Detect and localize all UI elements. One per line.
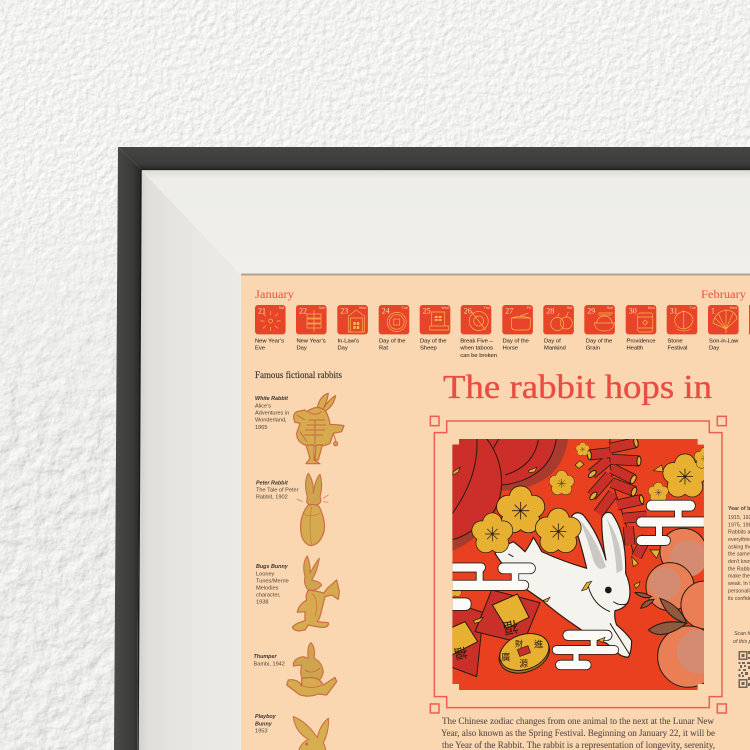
day 1: Son-in-Law Day xyxy=(708,305,739,352)
day 25: Day of the Sheep: Sheep xyxy=(420,346,437,352)
day 22: New Year's Day: 22 xyxy=(299,306,307,316)
caption: Bugs Bunny xyxy=(256,564,289,606)
day 24: Day of the Rat: Tue xyxy=(402,306,408,310)
day 25: Day of the Sheep xyxy=(420,305,450,352)
day 21: New Year's Eve: Eve xyxy=(255,346,265,352)
icon: White Rabbit xyxy=(294,393,344,464)
caption: Bugs Bunny: Tunes/Merrie xyxy=(256,579,289,585)
caption: Playboy Bunny: Playboy xyxy=(255,714,277,720)
poster paper xyxy=(241,274,750,750)
caption: Bugs Bunny: Bugs Bunny xyxy=(256,564,289,570)
stylised clouds xyxy=(443,501,717,669)
day 31: Stone Festival xyxy=(667,305,697,352)
day 29: Day of the Grain: Grain xyxy=(586,346,600,352)
day 23: In-Law's Day: Mon xyxy=(359,306,366,310)
lanterns xyxy=(450,437,568,552)
icon: Thumper xyxy=(287,643,337,696)
red envelopes: 福 xyxy=(453,644,469,661)
caption: Playboy Bunny: 1953 xyxy=(255,729,267,735)
day 30: Providence Health: Mon xyxy=(648,306,655,310)
day 29: Day of the Grain xyxy=(584,305,615,352)
caption: Peter Rabbit: Peter Rabbit xyxy=(256,480,288,486)
caption: White Rabbit: White Rabbit xyxy=(255,396,288,402)
day 27: Day of the Horse: Horse xyxy=(502,346,518,352)
day 26: Break Five xyxy=(459,305,497,359)
day 1: Son-in-Law Day: 1 xyxy=(711,306,715,316)
day 22: New Year's Day: Day xyxy=(296,346,307,352)
caption: Bugs Bunny: 1938 xyxy=(256,600,268,606)
month label: February: February xyxy=(701,289,746,301)
day 27: Day of the Horse: Day of the xyxy=(502,338,529,344)
day 29: Day of the Grain: Day of the xyxy=(586,338,612,344)
month label: January: January xyxy=(255,289,294,301)
intro paragraph: The Chinese zodiac changes from one animal to the next at the Lunar New xyxy=(442,716,714,727)
day 30: Providence Health: Providence xyxy=(627,338,656,344)
firecrackers xyxy=(587,438,647,557)
day 31: Stone Festival: Tue xyxy=(690,306,696,310)
caption: Playboy Bunny: Bunny xyxy=(255,721,273,727)
day 28: Day of Mankind: Sat xyxy=(567,306,572,310)
day 30: Providence Health xyxy=(626,305,656,352)
icon: Bugs Bunny xyxy=(292,556,339,631)
day 25: Day of the Sheep: Wed xyxy=(441,306,449,310)
day 28: Day of Mankind: Mankind xyxy=(544,346,566,352)
day 21: New Year's Eve xyxy=(255,305,286,352)
intro paragraph xyxy=(441,716,715,750)
day 31: Stone Festival: Festival xyxy=(668,346,687,352)
illustration: leaping rabbit xyxy=(452,439,704,690)
caption: Peter Rabbit: The Tale of Peter xyxy=(256,487,299,493)
picture frame xyxy=(114,147,750,750)
title: The rabbit hops in xyxy=(443,369,712,406)
caption: Peter Rabbit: Rabbit, 1902 xyxy=(256,495,288,501)
day 21: New Year's Eve: Sat xyxy=(279,306,284,310)
day 23: In-Law's Day: 23 xyxy=(340,306,348,316)
next day tile, cropped xyxy=(749,305,750,334)
day 29: Day of the Grain: Sun xyxy=(607,306,613,310)
day 28: Day of Mankind: Day of xyxy=(544,338,561,344)
caption: White Rabbit xyxy=(255,396,289,431)
day 25: Day of the Sheep: 25 xyxy=(423,306,431,316)
red envelopes: 福 xyxy=(502,617,520,636)
day 28: Day of Mankind: 28 xyxy=(546,306,554,316)
day 26: Break Five: when taboos xyxy=(459,346,493,352)
gold coin: 進 xyxy=(534,638,544,649)
caption: White Rabbit: 1865 xyxy=(255,425,267,431)
rabbit xyxy=(495,512,632,657)
gold coin xyxy=(498,633,550,674)
caption: Bugs Bunny: character, xyxy=(256,593,281,599)
oranges and leaves xyxy=(634,528,704,688)
QR code xyxy=(738,651,750,688)
day 24: Day of the Rat xyxy=(379,305,409,352)
calendar strip xyxy=(255,305,750,359)
day 22: New Year's Day: Sun xyxy=(319,306,325,310)
illustration background xyxy=(450,437,707,693)
day 24: Day of the Rat: 24 xyxy=(382,306,390,316)
day 26: Break Five: 26 xyxy=(464,306,472,316)
day 22: New Year's Day xyxy=(296,305,327,352)
QR caption xyxy=(733,631,750,645)
day 26: Break Five: Break Five – xyxy=(460,338,494,344)
caption: White Rabbit: Alice's xyxy=(255,403,271,409)
day 28: Day of Mankind xyxy=(543,305,574,352)
gold coin: 廣 xyxy=(501,652,510,663)
day 23: In-Law's Day: Day xyxy=(337,346,348,352)
day 21: New Year's Eve: 21 xyxy=(258,306,266,316)
day 30: Providence Health: 30 xyxy=(629,306,637,316)
panel: fictional rabbits xyxy=(254,393,344,750)
icon: Peter Rabbit xyxy=(297,473,328,546)
decorative red frame xyxy=(430,416,726,713)
day 30: Providence Health: Health xyxy=(627,346,643,352)
day 31: Stone Festival: 31 xyxy=(670,306,678,316)
plum blossoms xyxy=(447,443,716,596)
day 22: New Year's Day: New Year’s xyxy=(296,338,326,344)
caption: Playboy Bunny xyxy=(255,714,277,735)
day 26: Break Five: Thu xyxy=(483,306,490,310)
intro paragraph: Year, also known as the Spring Festival. Beginning on January 22, it will be xyxy=(441,728,715,739)
day 27: Day of the Horse: Fri xyxy=(527,306,531,310)
caption: White Rabbit: Adventures in xyxy=(255,410,289,416)
day 23: In-Law's Day: In-Law’s xyxy=(337,338,359,344)
day 1: Son-in-Law Day: Day xyxy=(709,346,719,352)
day 29: Day of the Grain: 29 xyxy=(587,306,595,316)
day 1: Son-in-Law Day: Son-in-Law xyxy=(709,338,739,344)
day 21: New Year's Eve: New Year’s xyxy=(255,338,284,344)
icon: Playboy Bunny xyxy=(293,717,328,750)
day 27: Day of the Horse xyxy=(502,305,533,352)
caption: Bugs Bunny: Looney xyxy=(256,571,275,577)
caption: Thumper: Thumper xyxy=(254,654,277,660)
day 24: Day of the Rat: Rat xyxy=(379,346,388,352)
heading: fictional rabbits: Famous fictional rabbits xyxy=(255,370,342,381)
red envelopes xyxy=(450,590,540,677)
day 26: Break Five: can be broken xyxy=(460,353,497,359)
caption: White Rabbit: Wonderland, xyxy=(255,418,287,424)
gold coin: 源 xyxy=(519,659,528,669)
day 31: Stone Festival: Stone xyxy=(668,338,683,344)
day 1: Son-in-Law Day: Wed xyxy=(730,306,737,310)
gold coin: 財 xyxy=(515,639,523,649)
day 23: In-Law's Day xyxy=(337,305,368,352)
gold confetti xyxy=(453,461,663,643)
day 27: Day of the Horse: 27 xyxy=(505,306,513,316)
caption: Peter Rabbit xyxy=(256,480,299,501)
caption: Thumper xyxy=(254,654,285,667)
caption: Bugs Bunny: Melodies xyxy=(256,586,279,592)
day 25: Day of the Sheep: Day of the xyxy=(420,338,446,344)
day 24: Day of the Rat: Day of the xyxy=(379,338,405,344)
text block: year of the rabbit xyxy=(728,506,750,602)
caption: Thumper: Bambi, 1942 xyxy=(254,661,285,667)
mat board xyxy=(138,169,750,750)
